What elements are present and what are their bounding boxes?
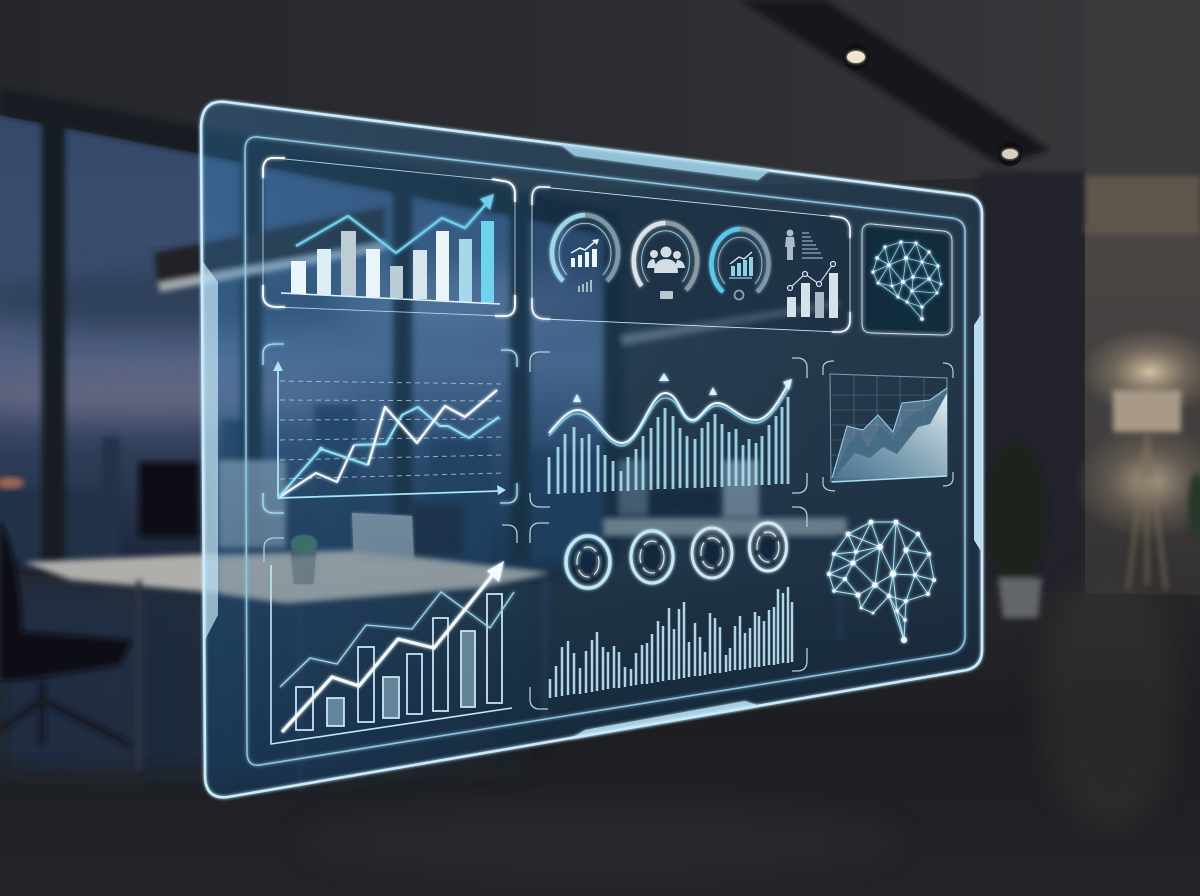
- ring 3: [692, 528, 732, 578]
- gauge: growth: [552, 215, 618, 281]
- comb bars: [549, 397, 788, 494]
- background trend line: [280, 592, 514, 687]
- panel: line chart with axes: [263, 344, 517, 513]
- holographic panel: [201, 102, 982, 797]
- wave lines: [549, 381, 790, 446]
- light area series: [832, 393, 947, 482]
- dark column: [978, 172, 1086, 612]
- pendant lamp: [154, 207, 840, 346]
- brackets: [264, 525, 517, 562]
- floor: [0, 575, 1200, 896]
- chart frame and grid: [830, 374, 947, 482]
- icon: growth chart: [571, 239, 599, 267]
- person and mini charts: [785, 230, 838, 318]
- window with dusk city view: [0, 115, 620, 570]
- trend line: [296, 194, 494, 253]
- small icons under gauges: [578, 280, 744, 300]
- ceiling: [0, 0, 1200, 300]
- window frames: [0, 88, 624, 570]
- gauge: team: [634, 223, 697, 290]
- brackets: [263, 344, 517, 513]
- ring gauges: [566, 523, 786, 588]
- panel: small brain network: [862, 224, 952, 335]
- ring 1: [566, 536, 610, 588]
- panel: inner frame: [245, 137, 965, 765]
- series lines: [278, 390, 499, 498]
- dark area series: [832, 388, 947, 478]
- panel: area chart: [823, 361, 953, 491]
- gauge: performance: [711, 229, 769, 292]
- panel: glass body and outer frame: [201, 102, 982, 797]
- ring 2: [631, 531, 673, 583]
- comb bars: [550, 587, 792, 698]
- axes: [271, 565, 512, 744]
- main arrow: [282, 561, 504, 732]
- peak markers and arrow: [573, 373, 792, 402]
- brackets: [530, 507, 807, 709]
- icon: team: [647, 246, 685, 273]
- bars: [291, 221, 494, 303]
- axis: [281, 293, 500, 304]
- panel: bottom-left growth chart: [264, 525, 517, 744]
- axes: [273, 361, 506, 498]
- dashed grid: [280, 381, 503, 479]
- icon: large brain network: [827, 520, 936, 643]
- floor lamp: [1113, 390, 1181, 590]
- panel: gauges and KPI icons: [532, 187, 850, 332]
- icon: performance chart: [729, 252, 753, 278]
- panel: ring gauges and bars: [530, 507, 807, 709]
- outlined bars: [296, 594, 502, 730]
- panel: wave chart with comb bars: [530, 352, 807, 507]
- ring 4: [750, 523, 786, 571]
- panel: top-left bar chart with trend line: [263, 158, 515, 316]
- potted plant: [986, 443, 1200, 618]
- brackets: [823, 361, 953, 491]
- back wall: [600, 175, 1085, 610]
- desks and office furniture: [0, 460, 847, 790]
- right wall with lamp glow: [1072, 0, 1200, 610]
- brackets: [530, 352, 807, 507]
